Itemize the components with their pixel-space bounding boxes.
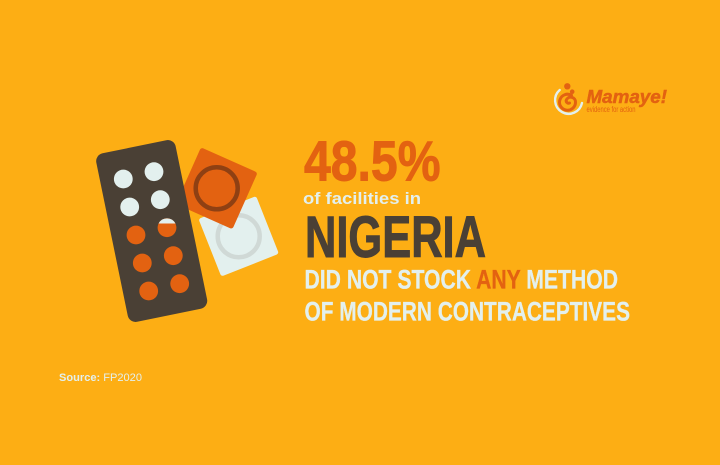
- icon: contraceptive pill blister pack: [95, 139, 209, 323]
- icon: logo spiral: [555, 83, 582, 114]
- icon: white condom packet: [198, 196, 279, 277]
- text: did not stock any method: DID NOT STOCK ANY METHOD: [304, 264, 618, 294]
- text: of facilities in: of facilities in: [303, 190, 421, 208]
- logo: Mamaye: [555, 83, 667, 114]
- text: of modern contraceptives: OF MODERN CONTRACEPTIVES: [304, 296, 630, 326]
- logo tagline: evidence for action: [586, 105, 636, 114]
- heading: Nigeria: NIGERIA: [305, 205, 486, 270]
- icon: orange condom packet: [176, 147, 258, 229]
- source note: Source: FP2020: [59, 372, 142, 384]
- illustration: pills and condoms: [95, 139, 279, 323]
- statistic: 48.5%: 48.5%: [304, 130, 440, 194]
- logo name: Mamaye!: [586, 86, 667, 107]
